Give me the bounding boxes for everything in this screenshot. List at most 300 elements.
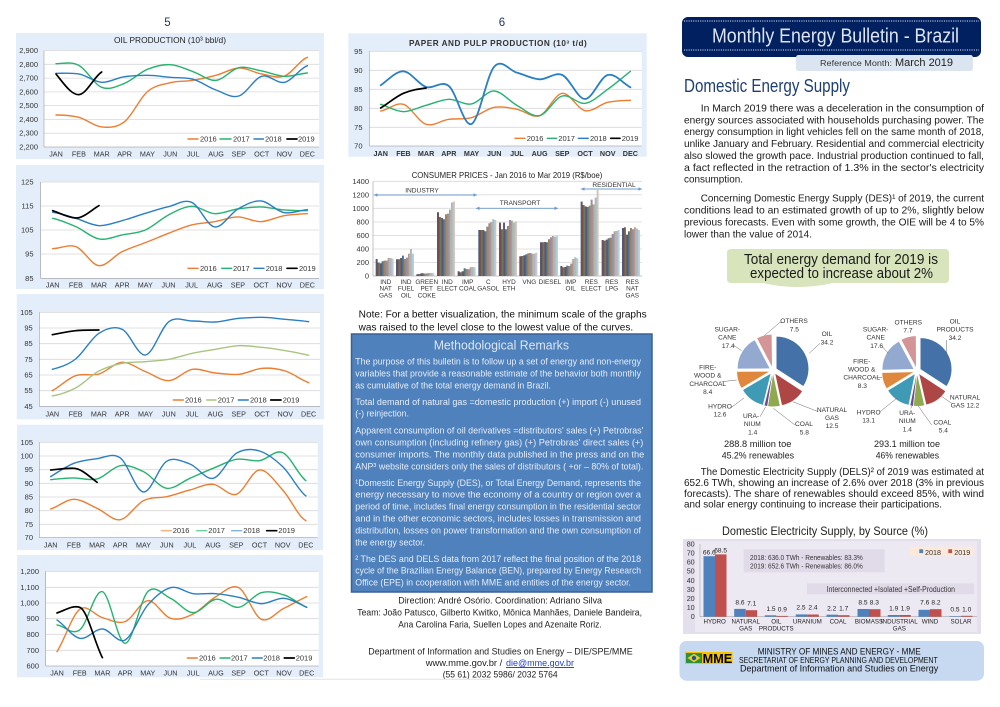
legend: 2019 bbox=[954, 548, 970, 557]
y axis labels: 65 bbox=[24, 370, 33, 380]
panel: fifth line chart bbox=[17, 555, 323, 678]
data labels: 68.5 bbox=[714, 548, 727, 555]
month labels: AUG bbox=[207, 281, 223, 290]
month labels: JAN bbox=[50, 669, 64, 678]
slice labels: 7.5 bbox=[790, 326, 799, 333]
remarks body text bbox=[355, 357, 644, 589]
category labels: WIND bbox=[922, 619, 939, 626]
y axis labels: 20 bbox=[687, 594, 695, 603]
slice labels: GAS 12.2 bbox=[951, 402, 980, 410]
y axis labels: 1000 bbox=[352, 204, 369, 213]
leader lines bbox=[722, 322, 820, 425]
month labels: JUN bbox=[160, 541, 174, 550]
legend: 2019 bbox=[283, 396, 299, 404]
month labels: DEC bbox=[298, 541, 313, 550]
bars 2019 bbox=[715, 554, 972, 617]
arrow: industry: INDUSTRY bbox=[405, 188, 439, 194]
month labels: NOV bbox=[600, 149, 616, 158]
legend: 2016 bbox=[173, 526, 189, 535]
remarks body text: Apparent consumption of oil derivatives =distributors' sales (+) Petrobras' bbox=[355, 425, 643, 436]
category labels: RES bbox=[626, 279, 639, 286]
paragraph: DES outlook: lower than the value of 2014. bbox=[684, 229, 812, 240]
month labels: MAR bbox=[418, 149, 435, 158]
y axis labels: 2,800 bbox=[19, 60, 38, 69]
slice labels: 34.2 bbox=[949, 335, 962, 342]
data lines bbox=[51, 449, 306, 521]
footer text bbox=[739, 646, 939, 673]
contact text: (55 61) 2032 5986/ 2032 5764 bbox=[443, 669, 558, 680]
credits text: Ana Carolina Faria, Suellen Lopes and Azenaite Roriz. bbox=[398, 619, 602, 630]
y axis labels: 100 bbox=[20, 452, 33, 460]
data labels: 1.9 bbox=[889, 605, 899, 612]
month labels: SEP bbox=[229, 541, 244, 550]
y axis labels: 10 bbox=[687, 603, 695, 612]
category labels: GREEN bbox=[415, 279, 438, 286]
legend: 2019 bbox=[622, 134, 638, 143]
month labels: OCT bbox=[577, 149, 593, 158]
data labels: 1.9 bbox=[901, 605, 910, 612]
slice labels: CANE bbox=[867, 334, 885, 342]
month labels: APR bbox=[118, 669, 132, 678]
month labels: JUL bbox=[184, 541, 196, 550]
y axis labels: 0 bbox=[365, 272, 369, 280]
category labels: ELECT bbox=[581, 286, 602, 293]
y axis labels: 2,600 bbox=[19, 87, 38, 96]
paragraph: DES outlook: Concerning Domestic Energy Supply (DES)¹ of 2019, the current bbox=[701, 194, 984, 204]
paragraph: March 2019 consumption: consumption. bbox=[684, 174, 743, 186]
month labels: JAN bbox=[374, 149, 388, 158]
paragraph: March 2019 consumption: energy sources associated with households purchasing power. The bbox=[684, 115, 984, 126]
totals box: 2018: 636.0 TWh - Renewables: 83.3% bbox=[750, 553, 863, 562]
month labels: APR bbox=[113, 541, 128, 550]
month labels: SEP bbox=[555, 149, 570, 158]
month labels: JUN bbox=[162, 281, 175, 290]
month labels: MAR bbox=[91, 410, 107, 419]
legend bbox=[188, 264, 316, 273]
month labels: MAY bbox=[140, 150, 155, 159]
y axis labels: 2,300 bbox=[19, 129, 38, 138]
pie chart: 2018 energy supply bbox=[689, 318, 847, 460]
legend: 2018 bbox=[265, 134, 282, 144]
y axis labels: 105 bbox=[21, 226, 34, 234]
month labels: JUN bbox=[164, 669, 177, 678]
month labels: MAY bbox=[136, 541, 151, 550]
category labels: BIOMASS bbox=[855, 619, 883, 626]
y axis labels: 1,100 bbox=[20, 583, 39, 592]
bar chart: electricity supply by source bbox=[683, 539, 981, 634]
slice labels: URA- bbox=[899, 410, 915, 417]
month labels: AUG bbox=[208, 410, 224, 419]
slice labels: FIRE- bbox=[699, 365, 716, 372]
chart: consumer prices bbox=[352, 170, 642, 300]
slice labels: 5.4 bbox=[939, 428, 948, 434]
paragraph: March 2019 consumption: a fact reflected in the retraction of 1.3% in the sector's electricity bbox=[684, 163, 985, 174]
month labels: NOV bbox=[275, 541, 291, 550]
data labels: 66.6 bbox=[703, 550, 716, 557]
footer text: SECRETARIAT OF ENERGY PLANNING AND DEVELOPMENT bbox=[739, 656, 938, 665]
heading: electricity supply by source: Domestic Electricity Supply, by Source (%) bbox=[722, 524, 928, 538]
month labels: OCT bbox=[254, 281, 269, 290]
y axis labels: 85 bbox=[25, 492, 33, 502]
slice labels: 5.8 bbox=[800, 430, 809, 436]
y axis labels bbox=[20, 438, 33, 542]
category labels: IMP bbox=[462, 279, 473, 286]
data labels: 2.5 bbox=[796, 605, 806, 612]
paragraph: domestic electricity supply: 652.6 TWh, showing an increase of 2.6% over 2018 (3% in previous bbox=[684, 478, 984, 489]
month labels: DEC bbox=[300, 150, 315, 159]
slice labels: 12.5 bbox=[826, 423, 839, 430]
y axis labels: 85 bbox=[354, 85, 362, 94]
y axis labels: 600 bbox=[26, 662, 39, 670]
pie caption: 288.8 million toe bbox=[724, 438, 791, 449]
y axis labels: 75 bbox=[354, 123, 362, 132]
y axis labels: 1200 bbox=[352, 190, 369, 199]
month labels: JUL bbox=[510, 149, 524, 158]
banner: monthly energy bulletin bbox=[682, 17, 981, 57]
month labels: MAR bbox=[89, 541, 105, 550]
remarks body text: (-) reinjection. bbox=[355, 409, 409, 420]
month labels: APR bbox=[115, 410, 130, 419]
legend: 2017 bbox=[218, 396, 234, 404]
legend bbox=[910, 547, 974, 557]
y axis labels bbox=[354, 47, 362, 150]
note text: Note: For a better visualization, the minimum scale of the graphs bbox=[359, 310, 647, 320]
remarks body text: period of time, includes final energy consumption in the residential sector bbox=[355, 502, 642, 513]
bars 2018 bbox=[704, 556, 961, 617]
remarks body text: distribution, losses on power transformation and the own consumption of bbox=[355, 525, 641, 536]
category labels bbox=[379, 279, 639, 300]
y axis labels: 90 bbox=[25, 479, 33, 488]
data lines bbox=[52, 317, 309, 396]
month labels: APR bbox=[115, 281, 130, 290]
y axis labels: 95 bbox=[354, 47, 362, 56]
legend: 2018 bbox=[263, 654, 280, 662]
month labels bbox=[49, 150, 315, 159]
slice labels: 17.6 bbox=[870, 343, 883, 350]
paragraph: DES outlook: previous forecasts. Even with some growth, the OIE will be 4 to 5% bbox=[684, 218, 984, 228]
month labels: DEC bbox=[623, 149, 638, 158]
y axis labels: 75 bbox=[24, 355, 33, 364]
slice labels: 13.1 bbox=[862, 418, 875, 424]
category labels: OIL bbox=[401, 292, 412, 300]
y axis labels: 80 bbox=[354, 104, 362, 113]
y axis labels: 60 bbox=[687, 558, 695, 566]
data labels: 2.4 bbox=[808, 605, 818, 612]
slice labels: OTHERS bbox=[780, 318, 808, 325]
slice labels: GAS bbox=[825, 415, 840, 422]
slice labels: OIL bbox=[822, 331, 833, 338]
arrow: transport bbox=[476, 200, 558, 210]
legend: 2019 bbox=[296, 654, 312, 662]
slice labels: NATURAL bbox=[817, 407, 847, 414]
legend: 2017 bbox=[208, 526, 225, 535]
reference month box bbox=[796, 55, 973, 71]
month labels: MAR bbox=[94, 669, 110, 678]
y axis labels: 115 bbox=[22, 202, 34, 210]
chart title: CONSUMER PRICES - Jan 2016 to Mar 2019 (R$/boe) bbox=[412, 170, 603, 180]
category labels: RES bbox=[585, 279, 598, 286]
category labels: URANIUM bbox=[793, 619, 822, 626]
data labels: 2.2 bbox=[827, 605, 837, 612]
category labels: NAT bbox=[626, 286, 639, 293]
month labels: NOV bbox=[276, 281, 292, 290]
y axis labels: 95 bbox=[25, 465, 33, 474]
slice labels: 8.3 bbox=[858, 383, 867, 390]
month labels: MAY bbox=[140, 669, 156, 678]
legend bbox=[173, 396, 299, 404]
note text bbox=[358, 310, 647, 333]
data lines bbox=[381, 64, 630, 125]
legend: 2018 bbox=[250, 396, 267, 404]
paragraph: DES outlook bbox=[684, 194, 984, 240]
paragraph: March 2019 consumption: In March 2019 there was a deceleration in the consumption of bbox=[701, 104, 984, 114]
y axis labels: 70 bbox=[25, 533, 33, 542]
y axis labels: 50 bbox=[687, 566, 695, 576]
y axis labels: 2,900 bbox=[19, 46, 38, 55]
y axis labels: 2,200 bbox=[19, 142, 38, 152]
remarks heading: Methodological Remarks bbox=[434, 338, 569, 352]
remarks body text: Office (EPE) in cooperation with MME and entities of the energy sector. bbox=[355, 578, 631, 589]
category labels: VNG bbox=[522, 279, 536, 286]
slice labels: 7.7 bbox=[903, 328, 913, 334]
category labels: GASOL bbox=[477, 286, 500, 293]
page number 5: 5 bbox=[164, 17, 171, 29]
month labels bbox=[44, 541, 313, 550]
icon: MME logo bbox=[685, 652, 732, 666]
slice labels: NIUM bbox=[899, 418, 916, 425]
category labels: GAS bbox=[893, 626, 906, 632]
category labels: RES bbox=[605, 279, 618, 286]
y axis labels bbox=[352, 177, 369, 280]
legend: 2019 bbox=[278, 526, 295, 535]
legend: 2018 bbox=[243, 526, 260, 535]
credits text: Team: João Patusco, Gilberto Kwitko, Mônica Manhães, Daniele Bandeira, bbox=[357, 608, 642, 619]
category labels: DIESEL bbox=[539, 279, 562, 286]
category labels: GAS bbox=[739, 626, 752, 632]
pie caption: 293.1 million toe bbox=[874, 438, 940, 449]
remarks body text: energy necessary to move the economy of a country or region over a bbox=[355, 490, 642, 501]
y axis labels: 800 bbox=[26, 630, 39, 639]
month labels: SEP bbox=[231, 281, 245, 290]
paragraph: domestic electricity supply bbox=[684, 467, 984, 510]
totals box bbox=[744, 549, 885, 572]
pie caption: 45.2% renewables bbox=[722, 449, 794, 460]
footer: ministry of mines and energy bbox=[680, 641, 984, 681]
month labels: NOV bbox=[278, 410, 293, 419]
paragraph: March 2019 consumption: also slowed the growth pace. Industrial production continued to fall, bbox=[684, 151, 984, 162]
panel: fourth line chart bbox=[17, 425, 323, 550]
y axis labels: 2,500 bbox=[19, 101, 38, 110]
remarks body text: cycle of the Brazilian Energy Balance (BEN), prepared by Energy Research bbox=[355, 566, 641, 577]
legend bbox=[161, 526, 295, 535]
y axis labels: 75 bbox=[25, 520, 33, 529]
y axis labels: 70 bbox=[354, 142, 362, 150]
month labels bbox=[46, 410, 316, 419]
month labels: SEP bbox=[232, 410, 246, 419]
legend: 2017 bbox=[233, 264, 250, 273]
y axis labels bbox=[687, 540, 695, 621]
month labels: APR bbox=[117, 150, 132, 159]
panel: methodological remarks bbox=[352, 334, 652, 592]
category labels: PET bbox=[420, 286, 433, 293]
y axis labels: 900 bbox=[26, 614, 39, 623]
month labels: OCT bbox=[254, 669, 269, 678]
y axis labels: 90 bbox=[354, 66, 362, 75]
y axis labels: 600 bbox=[356, 231, 369, 240]
category labels: NAT bbox=[380, 286, 392, 293]
month labels: MAR bbox=[91, 281, 107, 290]
slice labels: 34.2 bbox=[821, 339, 834, 346]
panel: second line chart bbox=[16, 165, 324, 290]
month labels: SEP bbox=[231, 669, 246, 678]
arrow: transport: TRANSPORT bbox=[500, 200, 540, 207]
y axis labels: 95 bbox=[25, 250, 34, 258]
panel: third line chart bbox=[17, 294, 324, 419]
contact text bbox=[368, 646, 633, 680]
callout: total energy demand bbox=[727, 249, 949, 287]
paragraph: March 2019 consumption: energy consumption in light vehicles fell on the same month of 2018, bbox=[684, 127, 984, 138]
y axis labels bbox=[19, 46, 38, 152]
footer text: Department of Information and Studies on Energy bbox=[740, 662, 939, 673]
remarks body text: The purpose of this bulletin is to follow up a set of energy and non-energy bbox=[355, 357, 641, 368]
pie caption bbox=[722, 438, 794, 460]
legend: 2018 bbox=[925, 548, 941, 557]
legend: 2016 bbox=[200, 264, 217, 273]
month labels bbox=[46, 281, 315, 290]
category labels: SOLAR bbox=[951, 619, 972, 626]
remarks body text: Total demand of natural gas =domestic production (+) import (-) unused bbox=[355, 397, 641, 408]
month labels: MAY bbox=[138, 281, 153, 290]
reference month box: Reference Month: bbox=[820, 58, 892, 68]
remarks body text: and in the other economic sectors, includes losses in transmission and bbox=[355, 513, 641, 524]
y axis labels: 1400 bbox=[352, 177, 369, 186]
month labels: JUL bbox=[187, 669, 200, 678]
category labels bbox=[704, 619, 972, 632]
slice labels: HYDRO bbox=[857, 410, 881, 416]
month labels: AUG bbox=[205, 541, 221, 550]
category labels: COAL bbox=[459, 286, 477, 293]
month labels: NOV bbox=[276, 669, 292, 678]
month labels: DEC bbox=[300, 281, 315, 290]
legend bbox=[188, 134, 315, 144]
note text: was raised to the level close to the lowest value of the curves. bbox=[358, 322, 633, 333]
month labels: AUG bbox=[208, 669, 224, 678]
y axis labels: 105 bbox=[20, 438, 33, 447]
month labels: MAY bbox=[138, 410, 153, 419]
month labels: JUN bbox=[162, 410, 176, 419]
category labels: FUEL bbox=[398, 286, 415, 293]
category labels: GAS bbox=[379, 292, 392, 300]
category labels: COAL bbox=[830, 619, 847, 626]
y axis labels: 30 bbox=[687, 585, 695, 594]
month labels: FEB bbox=[69, 410, 83, 419]
pie slices bbox=[737, 335, 808, 406]
slice labels: 1.4 bbox=[903, 426, 912, 433]
legend: 2017 bbox=[233, 134, 250, 144]
legend: 2016 bbox=[199, 654, 216, 662]
month labels: OCT bbox=[254, 150, 270, 159]
month labels bbox=[374, 149, 638, 158]
month labels: AUG bbox=[208, 150, 224, 159]
category labels: INDUSTRIAL bbox=[881, 619, 918, 626]
y axis labels: 40 bbox=[687, 576, 695, 585]
legend: 2016 bbox=[185, 396, 202, 404]
data labels: 0.9 bbox=[778, 607, 787, 614]
legend: 2018 bbox=[266, 264, 282, 273]
month labels: AUG bbox=[532, 149, 548, 158]
y axis labels: 700 bbox=[26, 646, 39, 655]
month labels: JUL bbox=[185, 281, 198, 290]
month labels: FEB bbox=[396, 149, 411, 158]
category labels: PRODUCTS bbox=[759, 626, 794, 632]
contact text: Department of Information and Studies on Energy – DIE/SPE/MME bbox=[368, 646, 633, 657]
remarks body text: as cumulative of the total energy demand in Brazil. bbox=[355, 380, 551, 391]
category labels: IND bbox=[400, 279, 412, 286]
footer text: MINISTRY OF MINES AND ENERGY - MME bbox=[758, 646, 921, 656]
category labels: IND bbox=[380, 279, 392, 286]
y axis labels: 400 bbox=[356, 244, 369, 254]
data labels: 8.6 bbox=[735, 599, 745, 606]
paragraph: domestic electricity supply: and solar energy continuing to increase their participations. bbox=[684, 499, 942, 510]
month labels: DEC bbox=[299, 669, 314, 678]
legend: 2017 bbox=[558, 134, 575, 143]
category labels: IMP bbox=[565, 279, 576, 286]
slice labels: COAL bbox=[795, 421, 813, 428]
leader lines bbox=[877, 340, 952, 425]
data labels: 7.1 bbox=[747, 600, 757, 607]
page number 6: 6 bbox=[499, 17, 505, 29]
slice labels: COAL bbox=[933, 420, 952, 426]
y axis labels bbox=[20, 308, 33, 411]
slice labels: WOOD & bbox=[848, 366, 876, 374]
arrow: industry bbox=[374, 188, 477, 197]
remarks body text: variables that provide a reasonable estimate of the behavior both monthly bbox=[355, 368, 641, 379]
month labels: JAN bbox=[44, 541, 57, 550]
slice labels: FIRE- bbox=[853, 358, 870, 366]
category labels: LPG bbox=[605, 286, 618, 293]
panel: oil production chart bbox=[16, 33, 324, 159]
remarks body text: the energy sector. bbox=[355, 537, 425, 548]
legend: 2019 bbox=[299, 264, 316, 273]
y axis labels: 85 bbox=[25, 274, 34, 283]
chart title: PAPER AND PULP PRODUCTION (10³ t/d) bbox=[409, 39, 587, 48]
chart title: OIL PRODUCTION (10³ bbl/d) bbox=[114, 35, 226, 45]
data labels: 8.5 bbox=[858, 599, 868, 606]
month labels: MAY bbox=[464, 149, 479, 158]
data labels: 1.0 bbox=[962, 607, 972, 614]
y axis labels: 1,000 bbox=[20, 598, 39, 608]
y axis labels: 80 bbox=[687, 540, 695, 548]
category labels: ETH bbox=[503, 286, 516, 293]
legend bbox=[515, 134, 638, 143]
pie caption: 46% renewables bbox=[876, 449, 939, 460]
data labels: 8.3 bbox=[870, 599, 879, 606]
legend bbox=[187, 654, 312, 662]
legend: 2018 bbox=[590, 134, 607, 143]
data labels: 1.7 bbox=[839, 605, 849, 612]
slice labels: URA- bbox=[743, 413, 759, 420]
y axis labels: 55 bbox=[24, 386, 33, 395]
slice labels: SUGAR- bbox=[714, 326, 740, 334]
category labels: HYD bbox=[502, 279, 516, 286]
panel: paper and pulp production chart bbox=[348, 33, 647, 158]
y axis labels: 105 bbox=[20, 308, 33, 317]
credits text bbox=[357, 596, 642, 630]
credits text: Direction: André Osório. Coordination: Adriano Silva bbox=[398, 596, 603, 607]
y axis labels bbox=[20, 567, 39, 670]
month labels: NOV bbox=[277, 150, 292, 159]
price bars bbox=[376, 190, 640, 276]
